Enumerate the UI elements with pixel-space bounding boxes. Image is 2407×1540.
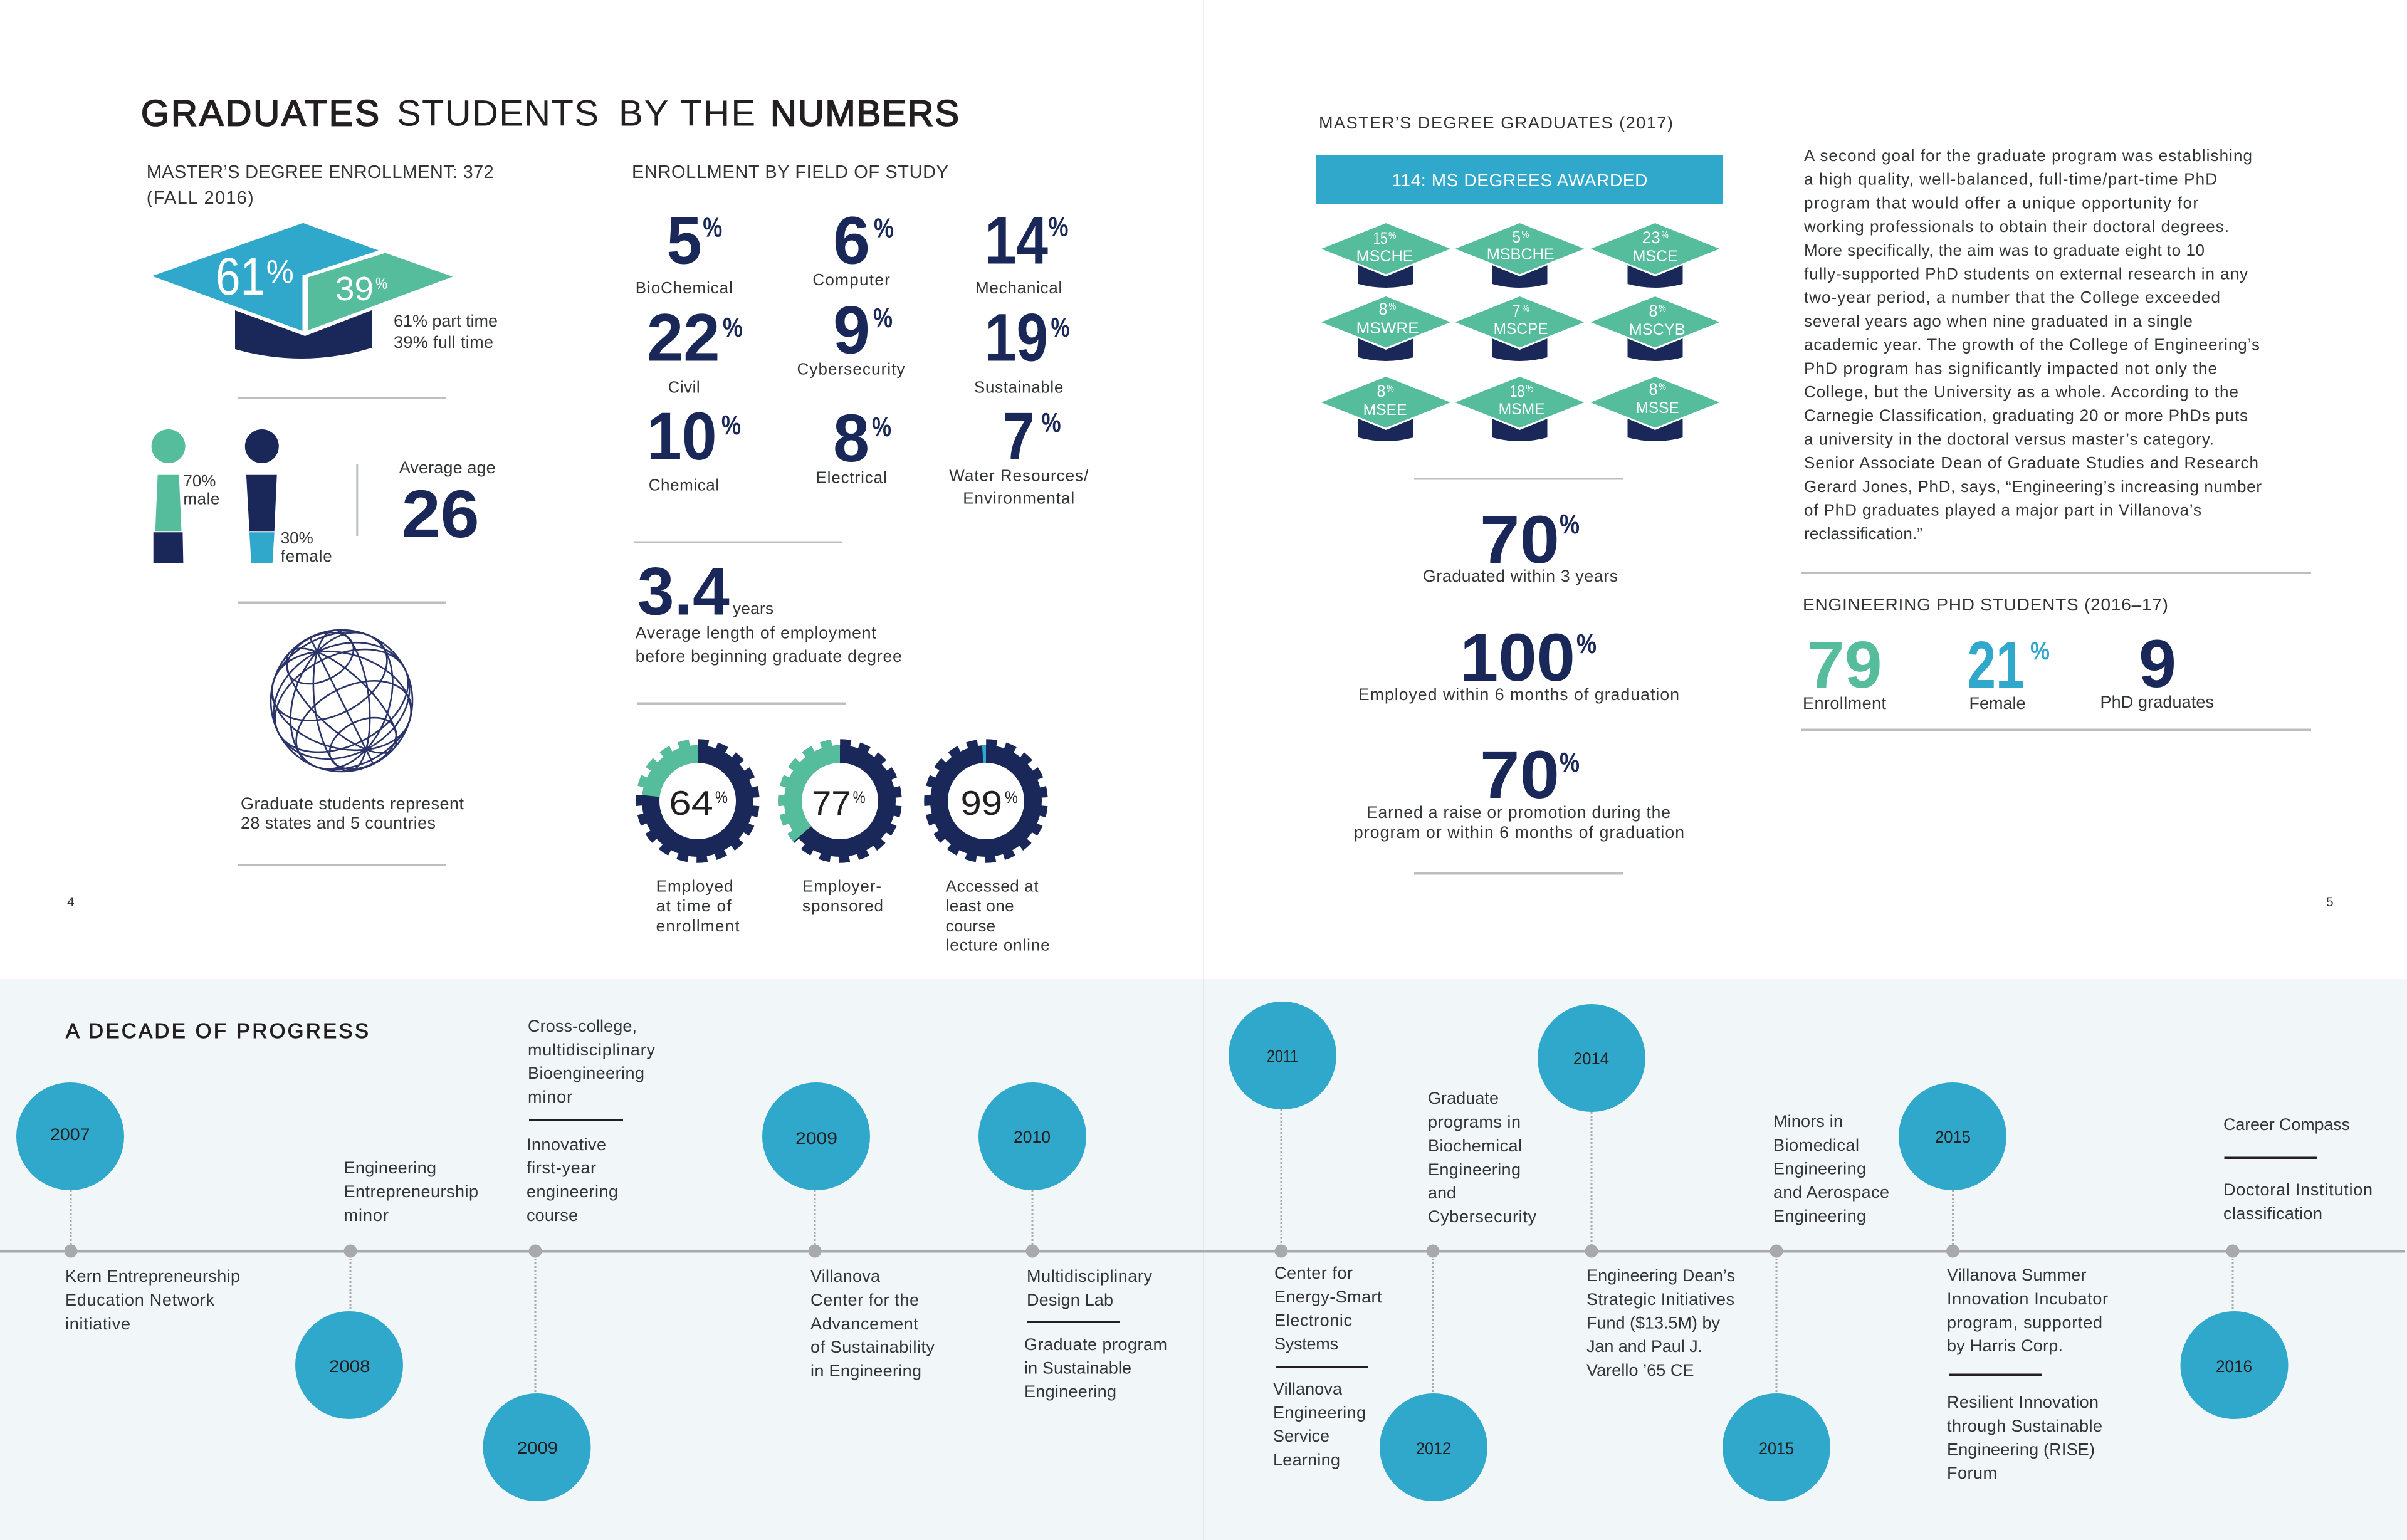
- cap: MSWRE 8%: %: [1388, 301, 1396, 312]
- title: GRADUATES: [141, 93, 379, 134]
- stat: 3.4 years: before beginning graduate degree: [636, 647, 902, 666]
- panel: employment gears: [639, 742, 1050, 955]
- panel: engineering PhD students: [1803, 595, 2214, 713]
- stat: 7% water resources: 7: [1002, 398, 1035, 474]
- cap: MSSE 8%: MSSE: [1636, 399, 1679, 417]
- cap: MSCYB 8%: [1591, 296, 1720, 361]
- milestone: 2016: Doctoral Institution: [2223, 1180, 2373, 1199]
- text block: PhD program narrative: a university in the doctoral versus master’s category.: [1804, 429, 2214, 448]
- stat: 70% graduated within 3 years: Graduated within 3 years: [1423, 567, 1618, 585]
- milestone: 2011: Villanova: [1273, 1380, 1343, 1398]
- cap: MSBCHE 5%: [1455, 223, 1585, 288]
- milestone: 2010: 2010: [1014, 1128, 1051, 1146]
- milestone: 2015 incubator: Innovation Incubator: [1947, 1289, 2108, 1308]
- icon: graduation cap split 61/39: 61: [216, 247, 265, 306]
- stat: 3.4 years: [636, 553, 902, 666]
- cap: MSCHE 15%: MSCHE: [1356, 248, 1413, 265]
- cap: MSWRE 8%: [1321, 296, 1450, 361]
- stat: 5% biochemical: BioChemical: [636, 278, 733, 297]
- stat: 19% sustainable: 19: [985, 300, 1048, 375]
- cap: MSME 18%: 18: [1509, 382, 1524, 401]
- milestone: 2015 incubator: Villanova Summer: [1947, 1265, 2086, 1284]
- label: employer-sponsored: [802, 877, 883, 915]
- cap: MSCYB 8%: %: [1659, 303, 1666, 314]
- heading: master's enrollment: [147, 162, 494, 208]
- milestone: 2015 minors: Biomedical: [1773, 1136, 1859, 1155]
- milestone: 2014: Strategic Initiatives: [1586, 1290, 1734, 1309]
- heading: PhD students: ENGINEERING PHD STUDENTS (2016–17): [1803, 595, 2168, 614]
- stat: average age: Average age: [399, 458, 496, 477]
- cap: MSCHE 15%: %: [1388, 231, 1397, 241]
- milestone: 2010: Multidisciplinary: [1027, 1267, 1152, 1286]
- stat: 5% biochemical: [636, 202, 733, 297]
- stat: 21% female: 21: [1967, 628, 2025, 702]
- milestone: 2012: and: [1428, 1183, 1456, 1202]
- stat: 22% civil: Civil: [668, 377, 700, 396]
- milestone: 2009 minor and course: engineering: [527, 1182, 618, 1201]
- stat: 3.4 years: 3.4: [637, 553, 730, 629]
- milestone: 2009 center for sustainability: of Sustainability: [810, 1338, 935, 1356]
- panel: master's degree enrollment: [147, 162, 498, 359]
- milestone: 2008: [295, 1158, 478, 1419]
- title: BY THE: [619, 93, 755, 134]
- stat: average age: 26: [402, 476, 480, 552]
- cap: MSCPE 7%: [1455, 296, 1585, 361]
- stat: 70% raise or promotion: [1354, 736, 1684, 842]
- milestone: 2011: Center for: [1274, 1264, 1353, 1282]
- text block: PhD program narrative: working professionals to obtain their doctoral degrees.: [1803, 217, 2229, 236]
- milestone: 2015 incubator: 2015: [1935, 1128, 1971, 1146]
- label: accessed online: Accessed at: [946, 877, 1039, 896]
- milestone: 2009 center for sustainability: in Engineering: [810, 1361, 921, 1380]
- milestone: 2010: Engineering: [1024, 1382, 1116, 1401]
- text block: PhD program narrative: Gerard Jones, PhD, says, “Engineering’s increasing number: [1804, 477, 2262, 496]
- stat: 9 PhD graduates: 9: [2139, 626, 2176, 701]
- label: employer-sponsored: sponsored: [802, 896, 883, 915]
- stat: 79 enrollment: 79: [1807, 628, 1882, 702]
- stat: 10% chemical: %: [721, 410, 741, 441]
- milestone: 2011: Service: [1273, 1427, 1329, 1445]
- cap: MSCE 23%: MSCE: [1633, 248, 1678, 265]
- milestone: 2015 incubator: Engineering (RISE): [1947, 1440, 2095, 1459]
- milestone: 2014: Fund ($13.5M) by: [1586, 1314, 1720, 1333]
- milestone: 2015 incubator: Resilient Innovation: [1947, 1393, 2099, 1412]
- milestone: 2009 minor and course: Bioengineering: [528, 1064, 644, 1082]
- icon: wireframe globe: [254, 614, 429, 787]
- stat: 9 PhD graduates: [2100, 626, 2214, 711]
- text: states and countries: [241, 794, 464, 832]
- milestone: 2012: Cybersecurity: [1428, 1207, 1537, 1226]
- stat: 7% water resources: [949, 398, 1089, 508]
- stat: 14% mechanical: 14: [985, 202, 1048, 278]
- milestone: 2009 minor and course: course: [527, 1206, 578, 1225]
- milestone: 2015 minors: 2015: [1759, 1439, 1794, 1458]
- text block: PhD program narrative: More specifically, the aim was to graduate eight to 10: [1804, 241, 2205, 259]
- milestone: 2009 minor and course: minor: [528, 1087, 572, 1106]
- cap: MSBCHE 5%: %: [1521, 229, 1529, 240]
- text block: PhD program narrative: a high quality, well-balanced, full-time/part-time PhD: [1804, 170, 2217, 189]
- milestone: 2014: Engineering Dean’s: [1586, 1266, 1735, 1285]
- label: 30% female: [281, 528, 332, 565]
- milestone: 2009 minor and course: [483, 1017, 656, 1501]
- stat: 100% employed: [1358, 619, 1679, 704]
- title: NUMBERS: [770, 93, 959, 134]
- legend: part time and full time: 39% full time: [394, 333, 493, 352]
- text: states and countries: Graduate students represent: [241, 794, 464, 813]
- milestone: 2015 minors: Minors in: [1773, 1112, 1843, 1131]
- cap: MSBCHE 5%: 5: [1512, 228, 1521, 246]
- label: 70% male: 70%: [183, 471, 216, 490]
- stat: 9% cybersecurity: 9: [833, 292, 870, 368]
- stat: 7% water resources: Environmental: [963, 489, 1074, 508]
- stat: 19% sustainable: Sustainable: [974, 377, 1063, 396]
- stat: 70% graduated within 3 years: %: [1560, 509, 1580, 540]
- milestone: 2007: Education Network: [65, 1291, 214, 1309]
- stat: 9% cybersecurity: [797, 292, 905, 379]
- milestone: 2010: Design Lab: [1027, 1291, 1113, 1309]
- text block: PhD program narrative: program that would offer a unique opportunity for: [1804, 193, 2198, 212]
- cap: MSSE 8%: [1591, 377, 1720, 441]
- milestone: 2008: Entrepreneurship: [343, 1182, 478, 1201]
- stat: 6% computer: %: [874, 213, 894, 244]
- stat: 22% civil: [647, 300, 743, 396]
- gear chart: 99% online lecture: 99: [960, 783, 1002, 822]
- cap: MSEE 8%: MSEE: [1363, 401, 1407, 419]
- icon: female figure 30%: [245, 429, 279, 563]
- milestone: 2014: Varello ’65 CE: [1586, 1361, 1694, 1380]
- panel: degree caps: [1321, 223, 1720, 441]
- milestone: 2009 center for sustainability: 2009: [795, 1129, 837, 1148]
- cap: MSCYB 8%: 8: [1649, 301, 1657, 320]
- milestone: 2009 minor and course: Innovative: [527, 1135, 606, 1154]
- gear chart: 64% employed: 64: [669, 783, 713, 822]
- milestone: 2012: programs in: [1428, 1113, 1521, 1131]
- cap: MSWRE 8%: MSWRE: [1356, 320, 1419, 337]
- milestone: 2007: initiative: [65, 1314, 130, 1333]
- panel: a decade of progress: [0, 979, 2407, 1540]
- label: accessed online: lecture online: [946, 936, 1050, 955]
- stat: 79 enrollment: Enrollment: [1803, 694, 1886, 713]
- title: [141, 93, 959, 134]
- milestone: 2014: Jan and Paul J.: [1586, 1337, 1702, 1356]
- stat: 9% cybersecurity: Cybersecurity: [797, 360, 905, 379]
- text block: PhD program narrative: two-year period, a number that the College exceeded: [1804, 288, 2220, 306]
- stat: 19% sustainable: [974, 300, 1069, 396]
- milestone: 2011: Systems: [1274, 1334, 1338, 1353]
- stat: 70% raise or promotion: program or within 6 months of graduation: [1354, 823, 1684, 842]
- stat: 8% electrical: 8: [833, 400, 869, 476]
- stat: 9 PhD graduates: PhD graduates: [2100, 693, 2214, 711]
- cap: MSEE 8%: %: [1387, 384, 1394, 394]
- milestone: 2012: Biochemical: [1428, 1136, 1522, 1155]
- stat: 21% female: Female: [1969, 694, 2026, 713]
- gear chart: 99% online lecture: %: [1005, 788, 1018, 807]
- milestone: 2007: [16, 1082, 240, 1333]
- text block: PhD program narrative: [1803, 146, 2262, 543]
- text block: PhD program narrative: A second goal for the graduate program was establishing: [1804, 146, 2252, 165]
- text block: PhD program narrative: of PhD graduates played a major part in Villanova’s: [1804, 500, 2201, 519]
- cap: MSME 18%: %: [1526, 384, 1533, 394]
- icon: graduation cap split 61/39: [152, 223, 453, 359]
- timeline axis: [0, 1250, 2405, 1252]
- heading: a decade of progress: A DECADE OF PROGRESS: [66, 1019, 369, 1042]
- stat: 5% biochemical: %: [703, 212, 722, 243]
- stat: 70% raise or promotion: %: [1560, 747, 1580, 778]
- text block: PhD program narrative: College, but the University as a whole. According to the: [1804, 382, 2238, 401]
- milestone: 2016: 2016: [2216, 1357, 2252, 1376]
- milestone: 2012: Graduate: [1428, 1089, 1499, 1108]
- banner: 114 MS degrees awarded: 114: MS DEGREES AWARDED: [1392, 170, 1647, 190]
- stat: 70% graduated within 3 years: [1423, 501, 1618, 585]
- milestone: 2015 incubator: through Sustainable: [1947, 1417, 2102, 1435]
- icon: graduation cap split 61/39: 39: [335, 270, 374, 308]
- cap: MSME 18%: [1455, 377, 1585, 441]
- label: employed at time of enrollment: [656, 877, 740, 935]
- stat: 6% computer: Computer: [812, 270, 890, 289]
- gear chart: 64% employed: %: [715, 788, 728, 807]
- stat: 9% cybersecurity: %: [873, 303, 893, 333]
- stat: 6% computer: 6: [833, 202, 870, 278]
- label: 30% female: female: [281, 547, 332, 565]
- panel: enrollment by field of study: [632, 162, 1089, 508]
- stat: 14% mechanical: [975, 202, 1068, 297]
- gear chart: 99% online lecture: [928, 742, 1044, 860]
- stat: 21% female: %: [2030, 637, 2050, 665]
- stat: 3.4 years: Average length of employment: [636, 623, 876, 642]
- milestone: 2009 minor and course: first-year: [527, 1158, 596, 1177]
- label: accessed online: [946, 877, 1050, 955]
- milestone: 2011: Electronic: [1274, 1311, 1352, 1330]
- milestone: 2010: [978, 1082, 1167, 1401]
- banner: 114 MS degrees awarded: [1316, 155, 1723, 204]
- milestone: 2009 center for sustainability: Advancement: [810, 1314, 918, 1333]
- cap: MSME 18%: MSME: [1499, 401, 1545, 418]
- cap: MSWRE 8%: 8: [1379, 300, 1388, 318]
- milestone: 2008: Engineering: [343, 1158, 436, 1177]
- label: employed at time of enrollment: at time of: [656, 896, 732, 915]
- milestone: 2009 minor and course: multidisciplinary: [528, 1040, 656, 1059]
- milestone: 2015 minors: and Aerospace: [1773, 1183, 1889, 1202]
- cap: MSCHE 15%: [1321, 223, 1450, 288]
- cap: MSCE 23%: [1591, 223, 1720, 288]
- stat: 14% mechanical: Mechanical: [975, 278, 1062, 297]
- label: employed at time of enrollment: enrollment: [656, 916, 740, 935]
- milestone: 2009 center for sustainability: Villanova: [810, 1267, 881, 1286]
- milestone: 2016: [2180, 1115, 2373, 1419]
- milestone: 2008: 2008: [329, 1357, 370, 1376]
- heading: master's degree graduates: MASTER’S DEGREE GRADUATES (2017): [1319, 113, 1673, 132]
- stat: 19% sustainable: %: [1051, 312, 1069, 343]
- milestone: 2010: in Sustainable: [1024, 1359, 1131, 1378]
- cap: MSCE 23%: 23: [1642, 228, 1660, 247]
- stat: 6% computer: [812, 202, 894, 289]
- icon: graduation cap split 61/39: %: [375, 274, 387, 293]
- text block: PhD program narrative: academic year. The growth of the College of Engineering’s: [1804, 335, 2260, 354]
- stat: 8% electrical: [815, 400, 891, 487]
- label: employed at time of enrollment: Employed: [656, 877, 733, 896]
- label: accessed online: course: [946, 916, 995, 935]
- stat: 100% employed: %: [1576, 629, 1597, 659]
- text block: PhD program narrative: Senior Associate Dean of Graduate Studies and Research: [1804, 453, 2258, 472]
- stat: 8% electrical: Electrical: [815, 468, 887, 487]
- heading: master's enrollment: (FALL 2016): [147, 188, 254, 208]
- cap: MSCPE 7%: %: [1522, 303, 1529, 314]
- milestone: 2009 center for sustainability: [762, 1082, 935, 1380]
- stat: 3.4 years: years: [733, 599, 773, 618]
- text block: PhD program narrative: several years ago when nine graduated in a single: [1804, 312, 2193, 330]
- cap: MSSE 8%: 8: [1649, 380, 1657, 399]
- stat: 70% graduated within 3 years: 70: [1480, 501, 1560, 577]
- stat: 70% raise or promotion: 70: [1480, 736, 1560, 812]
- heading: master's enrollment: MASTER’S DEGREE ENROLLMENT: 372: [147, 162, 494, 182]
- label: 70% male: [183, 471, 219, 508]
- label: employer-sponsored: Employer-: [802, 877, 881, 896]
- milestone: 2015 incubator: [1899, 1082, 2108, 1482]
- milestone: 2009 minor and course: Cross-college,: [528, 1017, 637, 1035]
- milestone: 2011: [1229, 1002, 1382, 1469]
- milestone: 2012: 2012: [1416, 1439, 1451, 1458]
- milestone: 2015 incubator: program, supported: [1947, 1313, 2102, 1332]
- milestone: 2011: Learning: [1273, 1450, 1340, 1469]
- cap: MSCPE 7%: 7: [1512, 301, 1521, 320]
- panel: gender split: [152, 429, 332, 565]
- cap: MSCYB 8%: MSCYB: [1629, 321, 1686, 338]
- stat: 7% water resources: %: [1042, 407, 1061, 438]
- stat: 100% employed: Employed within 6 months of graduation: [1358, 685, 1679, 704]
- icon: graduation cap split 61/39: %: [266, 254, 294, 290]
- label: 30% female: 30%: [281, 528, 313, 547]
- stat: 10% chemical: 10: [647, 398, 717, 474]
- text block: PhD program narrative: PhD program has significantly impacted not only the: [1804, 359, 2217, 377]
- milestone: 2011: 2011: [1267, 1047, 1298, 1066]
- gear chart: 77% employer sponsored: [781, 742, 899, 860]
- milestone: 2015 incubator: Forum: [1947, 1464, 1997, 1482]
- milestone: 2014: [1538, 1004, 1735, 1380]
- milestone: 2009 center for sustainability: Center for the: [810, 1291, 919, 1309]
- milestone: 2014: 2014: [1573, 1049, 1609, 1068]
- legend: part time and full time: 61% part time: [394, 312, 498, 330]
- milestone: 2011: Energy-Smart: [1274, 1287, 1382, 1306]
- milestone: 2007: Kern Entrepreneurship: [65, 1267, 240, 1286]
- gear chart: 77% employer sponsored: 77: [812, 783, 851, 822]
- stat: 10% chemical: Chemical: [649, 476, 719, 495]
- text block: PhD program narrative: fully-supported PhD students on external research in any: [1804, 265, 2248, 283]
- label: accessed online: least one: [946, 896, 1014, 915]
- milestone: 2012: [1380, 1089, 1537, 1501]
- stat: average age: [399, 458, 496, 552]
- milestone: 2012: Engineering: [1428, 1160, 1521, 1179]
- text block: PhD program narrative: reclassification.”: [1804, 524, 1922, 543]
- cap: MSCE 23%: %: [1661, 230, 1669, 241]
- stat: 70% raise or promotion: Earned a raise or promotion during the: [1366, 803, 1670, 822]
- milestone: 2011: Engineering: [1273, 1403, 1366, 1422]
- stat: 7% water resources: Water Resources/: [949, 466, 1089, 485]
- page number 4: 4: [67, 895, 75, 909]
- cap: MSEE 8%: 8: [1377, 382, 1385, 401]
- milestone: 2007: 2007: [50, 1125, 90, 1144]
- cap: MSSE 8%: %: [1659, 382, 1666, 392]
- heading: enrollment by field: ENROLLMENT BY FIELD OF STUDY: [632, 162, 948, 182]
- milestone: 2016: Career Compass: [2223, 1115, 2350, 1134]
- stat: 5% biochemical: 5: [667, 202, 702, 278]
- icon: male figure 70%: [152, 429, 186, 563]
- milestone: 2010: Graduate program: [1024, 1335, 1167, 1354]
- gear chart: 77% employer sponsored: %: [853, 788, 866, 807]
- stat: 22% civil: 22: [647, 300, 720, 375]
- label: 70% male: male: [183, 489, 219, 508]
- gear chart: 64% employed: [639, 742, 756, 860]
- stat: 14% mechanical: %: [1048, 212, 1068, 243]
- cap: MSBCHE 5%: MSBCHE: [1487, 246, 1555, 263]
- page number 5: 5: [2326, 895, 2334, 909]
- cap: MSCHE 15%: 15: [1373, 229, 1388, 248]
- stat: 22% civil: %: [723, 312, 743, 343]
- stat: 8% electrical: %: [872, 412, 891, 443]
- milestone: 2015 minors: Engineering: [1773, 1207, 1866, 1225]
- milestone: 2016: classification: [2223, 1204, 2322, 1223]
- milestone: 2015 minors: [1723, 1112, 1889, 1501]
- cap: MSEE 8%: [1321, 377, 1450, 441]
- milestone: 2009 minor and course: 2009: [517, 1438, 558, 1457]
- milestone: 2015 minors: Engineering: [1773, 1160, 1866, 1178]
- text: states and countries: 28 states and 5 countries: [241, 814, 436, 832]
- milestone: 2015 incubator: by Harris Corp.: [1947, 1336, 2063, 1355]
- stat: 100% employed: 100: [1460, 619, 1575, 695]
- cap: MSCPE 7%: MSCPE: [1494, 320, 1548, 338]
- stat: 10% chemical: [647, 398, 741, 495]
- title: STUDENTS: [397, 93, 599, 134]
- text block: PhD program narrative: Carnegie Classification, graduating 20 or more PhDs puts: [1804, 406, 2248, 425]
- legend: part time and full time: [394, 312, 498, 352]
- milestone: 2008: minor: [343, 1206, 389, 1225]
